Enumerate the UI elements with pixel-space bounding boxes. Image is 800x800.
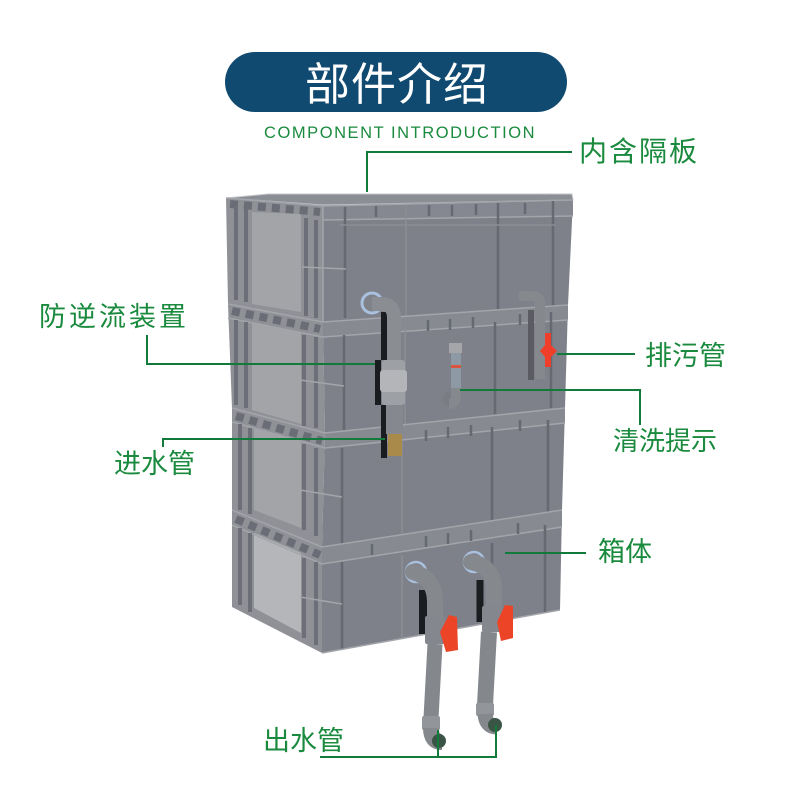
sight tube for cleaning bbox=[443, 343, 462, 407]
callout: tank body: 箱体 bbox=[598, 537, 652, 567]
callout: cleaning indicator bbox=[460, 390, 717, 456]
crate tier 2 bbox=[228, 304, 568, 433]
subtitle: COMPONENT INTRODUCTION bbox=[264, 124, 536, 142]
stacked crate tank bbox=[226, 194, 573, 653]
pipe: right outlet bbox=[464, 552, 513, 732]
pipe: left outlet bbox=[406, 562, 458, 748]
callout: cleaning indicator: 清洗提示 bbox=[613, 426, 717, 456]
callout: backflow device bbox=[39, 302, 375, 364]
callout: internal partition: 内含隔板 bbox=[579, 136, 699, 167]
pipe: drain with red valve bbox=[519, 296, 557, 380]
title banner bbox=[225, 52, 567, 112]
crate tier 4 (lowest) bbox=[232, 510, 562, 653]
callout: water outlet: 出水管 bbox=[263, 726, 344, 756]
crate tier 3 bbox=[232, 408, 565, 547]
callout: water inlet bbox=[114, 439, 385, 479]
callout: water inlet: 进水管 bbox=[114, 449, 195, 479]
callout: backflow device: 防逆流装置 bbox=[39, 302, 189, 332]
crate tier 1 bbox=[226, 198, 573, 322]
crate lid opening bbox=[226, 194, 573, 205]
callout: drain pipe: 排污管 bbox=[645, 341, 726, 371]
callout: internal partition bbox=[367, 136, 699, 192]
callout: water outlet bbox=[263, 725, 496, 757]
pipe: backflow prevention with inlet bbox=[362, 293, 407, 458]
title banner: 部件介绍 bbox=[305, 59, 489, 110]
